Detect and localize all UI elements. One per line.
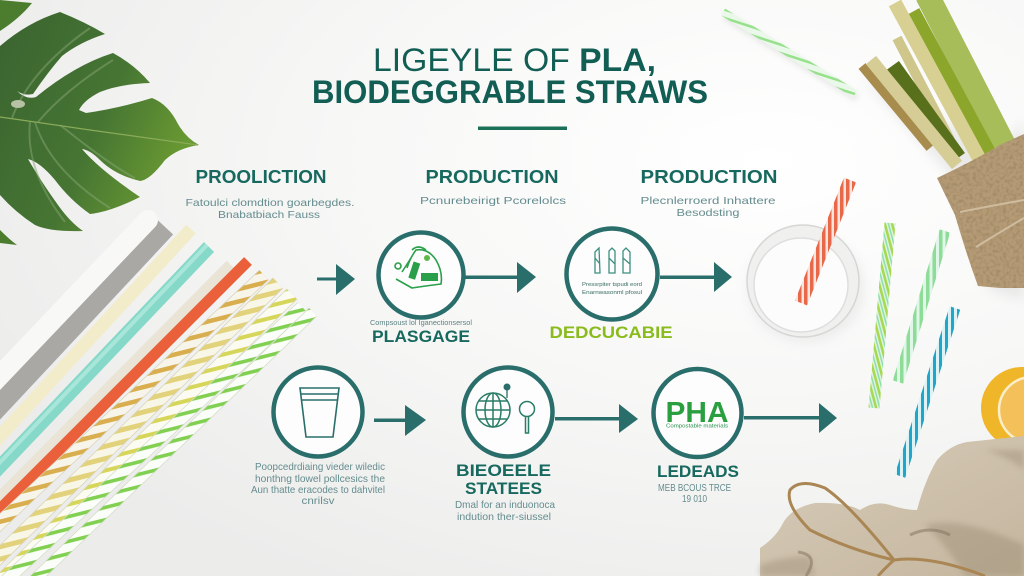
step: third production heading: PRODUCTION [640,167,778,187]
orange straw [0,261,248,519]
arrow: into bag step [317,264,355,295]
leaf decoration [0,0,199,245]
step label: dedcucabie: DEDCUCABIE [550,323,672,342]
twine [789,483,985,576]
step label: ledeads [657,462,739,505]
step: second production heading: PRODUCTION [426,167,558,187]
step icon: PHA: PHA [666,397,729,429]
step label: bieoeele statees: indution ther-siussel [457,511,551,523]
green striped straw [0,307,302,576]
teal straw [0,245,209,477]
arrow: PHA onward [744,403,837,433]
step text: cup description: honthng tlowel pollcesics the [255,473,385,485]
burlap pot [937,134,1024,288]
step label: bieoeele statees [455,461,555,523]
step text: cup description: Poopcedrdiaing vieder wiledic [255,461,385,473]
step label: ledeads: 19 010 [682,493,707,505]
title rule [478,126,567,130]
step text: cup description [251,461,385,507]
green striped straw front [28,312,313,576]
yellow striped straw [0,283,278,565]
bamboo in burlap pot [860,0,1024,300]
step: first production heading: PROOLICTION [196,167,326,187]
loose green straw two [898,231,945,382]
top loose green straw [723,12,857,98]
step icon: PHA [654,369,742,457]
arrow: cup to globe [374,405,426,436]
step: first production heading [186,167,354,221]
step icon: globe [464,368,552,456]
step label: bieoeele statees: BIEOEELE [456,461,551,480]
step icon: cup [274,368,362,456]
title: LIGEYLE OF PLA, [373,42,656,78]
glass of milk with straw [747,180,864,342]
step label: ledeads: LEDEADS [657,462,739,481]
step: third production heading: Plecnlerroerd Inhattere [640,195,776,207]
step icon: cutlery: Enarnwasonml pfosul [582,290,642,296]
striped drinking straw [801,180,850,303]
arrow: bag to cutlery [465,262,536,293]
step icon: cutlery [566,228,658,320]
step label: ledeads: MEB BCOUS TRCE [658,482,731,494]
lime striped straw [0,294,292,576]
step label: plasgage: PLASGAGE [372,327,470,346]
step icon: cutlery: Pressrpiter tspudi eord [582,282,642,288]
step: third production heading [640,167,778,219]
step: first production heading: Bnabatbiach Fauss [218,209,320,221]
left straw bundle [0,220,313,576]
step text: cup description: cnrilsv [302,495,335,507]
beige straw [0,266,232,510]
loose blue straw [900,308,955,476]
linen cloth with twine [760,436,1024,576]
cream straw [0,229,191,447]
loose green straw one [874,223,890,408]
step label: plasgage [370,318,472,346]
title: BIODEGGRABLE STRAWS [312,74,708,110]
gold striped straw [0,275,264,532]
step icon: compost bag [378,232,464,318]
step label: bieoeele statees: STATEES [465,479,542,498]
arrow: cutlery to glass [660,262,732,292]
white and gray straw [0,220,164,412]
title [312,42,708,110]
step: second production heading: Pcnurebeirigt Pcorelolcs [420,195,566,207]
lemon [981,367,1024,449]
step label: plasgage: Compsoust lol Iganectionsersol [370,318,472,327]
step: first production heading: Fatoulci clomdtion goarbegdes. [186,197,354,209]
step: second production heading [420,167,566,207]
step: third production heading: Besodsting [676,207,740,219]
arrow: globe to PHA [555,404,638,433]
step label: bieoeele statees: Dmal for an induonoca [455,499,555,511]
step text: cup description: Aun thatte eracodes to dahvitel [251,484,385,496]
step icon: PHA: Compostable materials [666,424,729,430]
